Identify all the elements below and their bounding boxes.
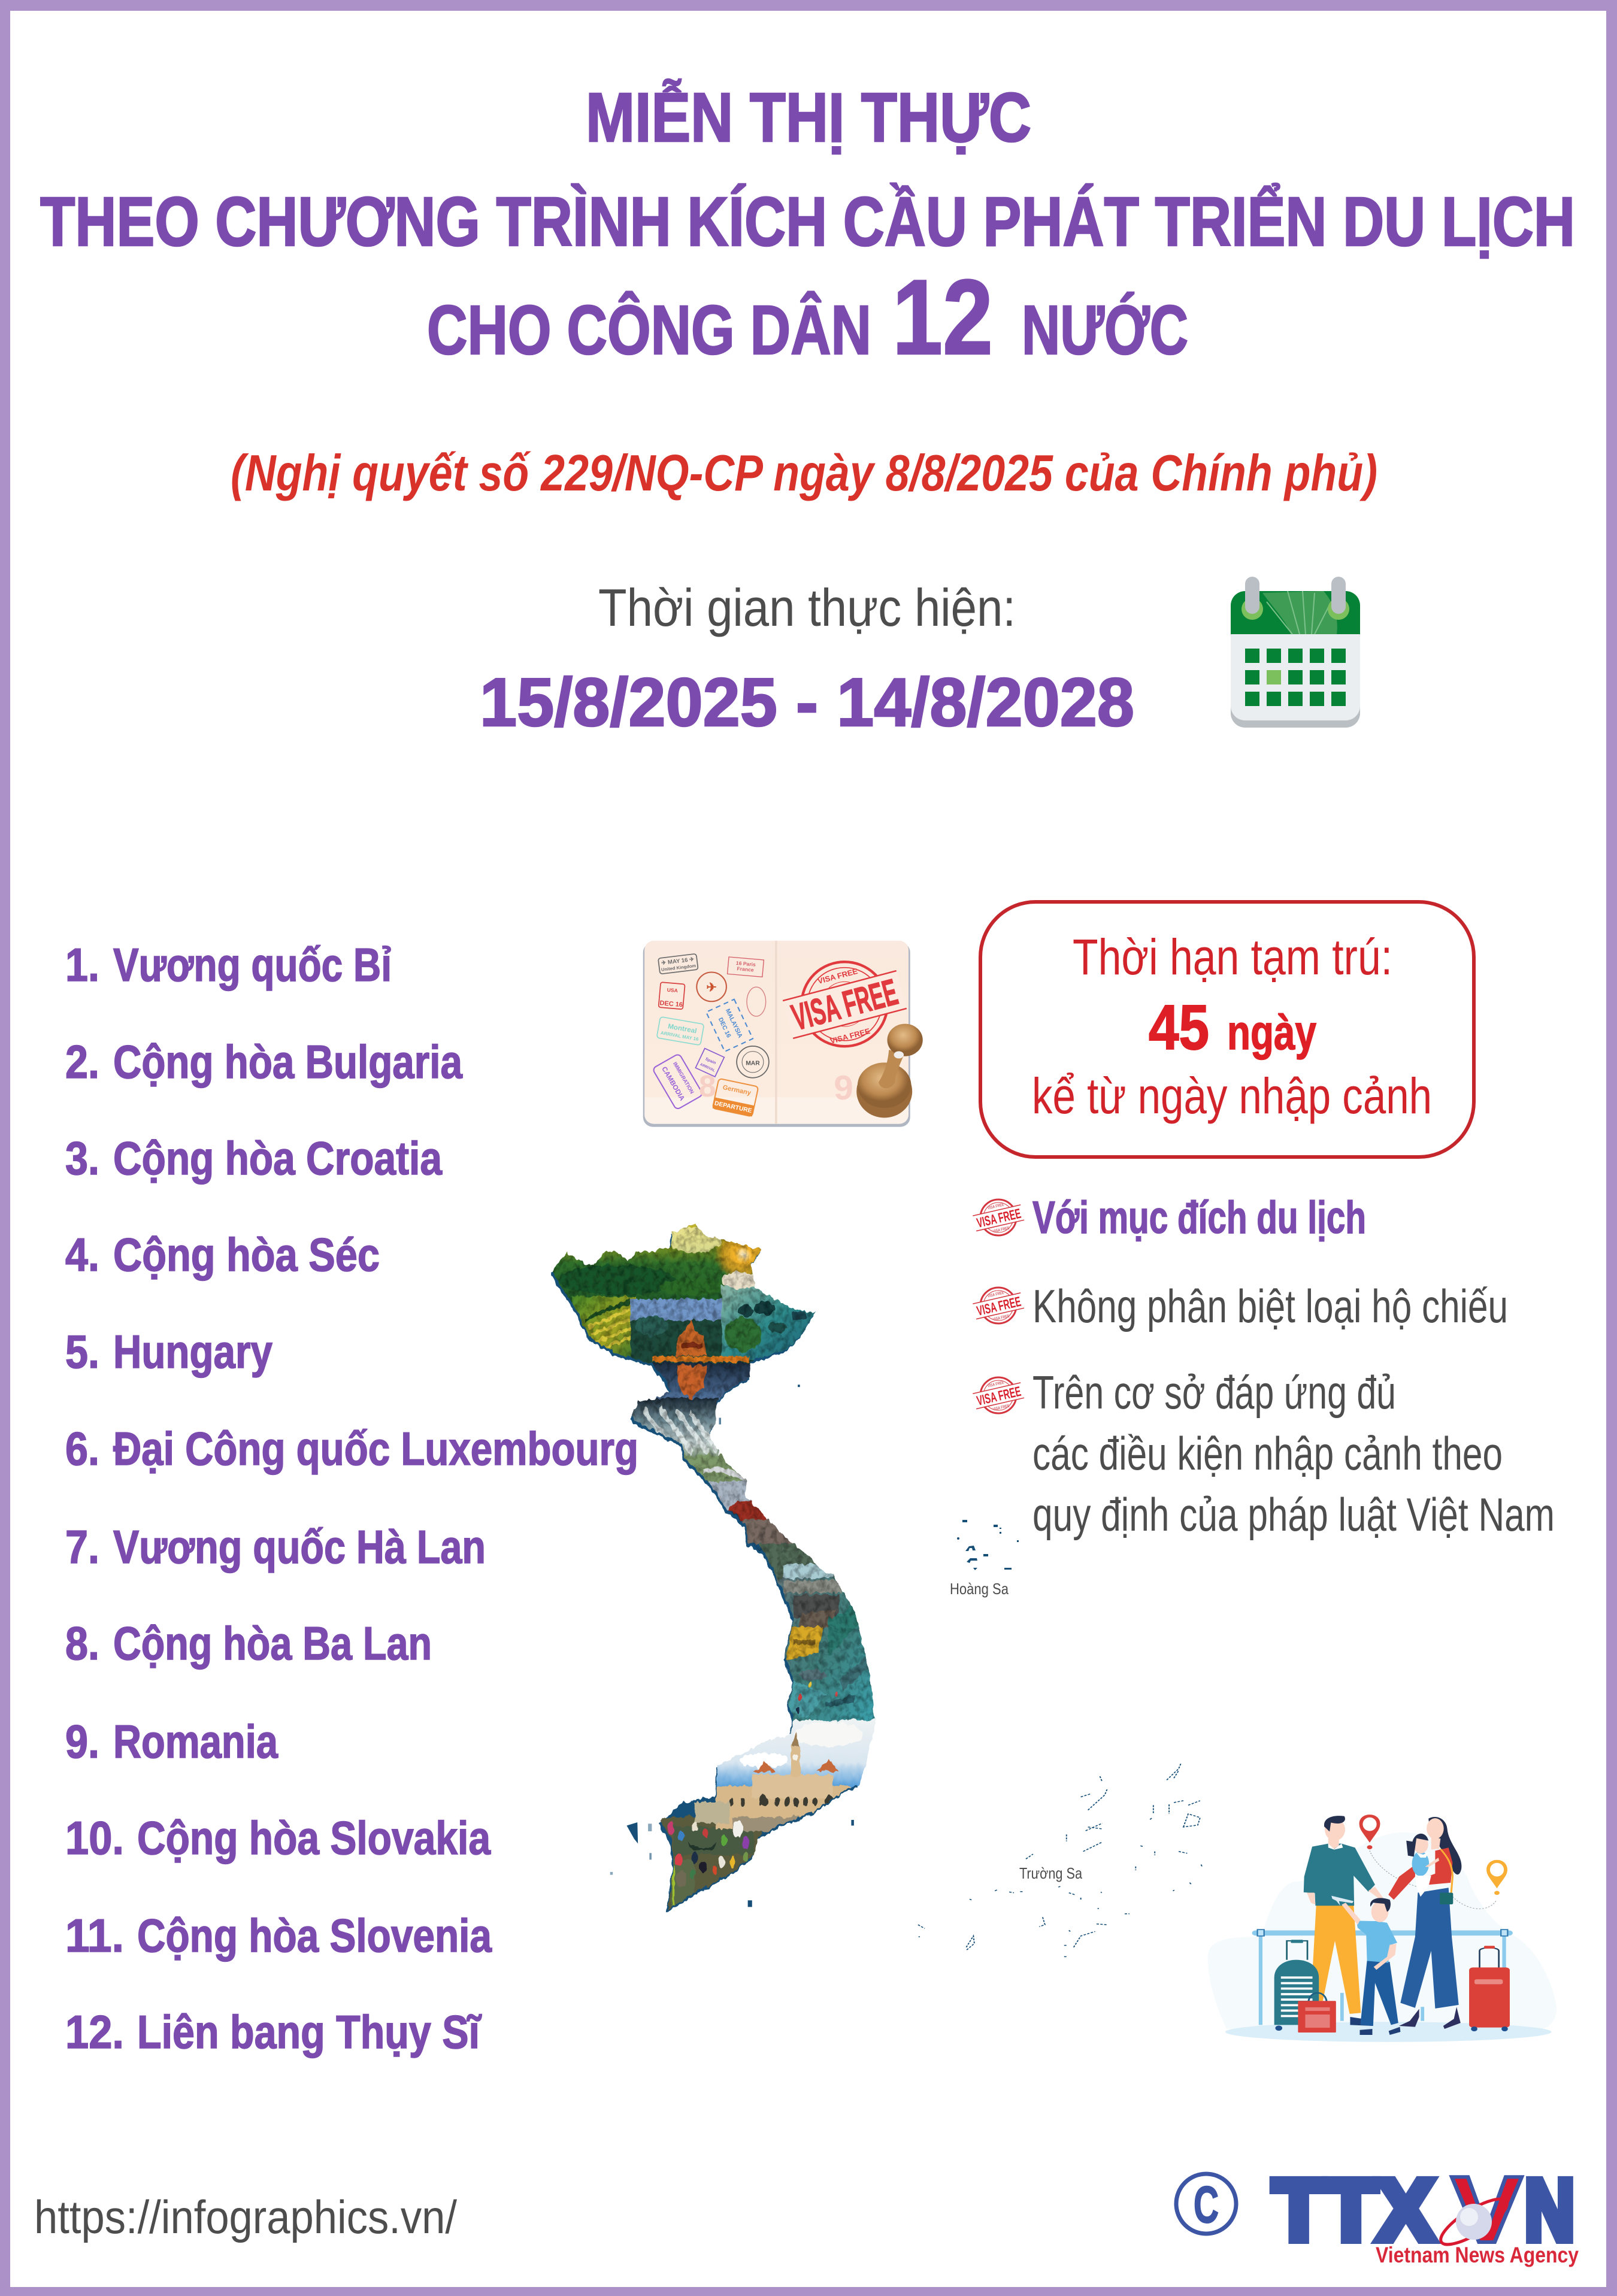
passport page stamps: MAR [746,1060,760,1067]
Hoàng Sa islands [957,1520,1019,1570]
list item 9 [65,1715,278,1768]
passport page stamps: DEPARTURE [714,1100,753,1114]
passport page stamps: CAMBODIA [660,1065,686,1102]
Hoàng Sa label: Hoàng Sa [950,1580,1009,1598]
red bag [1298,1993,1336,2033]
passport page stamps: 16 Paris [736,960,756,968]
list item 9: Romania [113,1715,278,1768]
passport page stamps: IMMIGRATION [672,1061,695,1095]
icon: visa free seal: VISA FREE [992,1314,1010,1322]
icon: visa free seal [971,1287,1026,1326]
callout: length of stay [980,902,1474,1157]
list item 8: 8. [65,1617,99,1670]
icon: copyright: C [1194,2176,1219,2234]
passport page stamps: 8 [699,1069,716,1103]
bullet text: Với mục đích du lịch [1032,1192,1366,1243]
passport page stamps: France [737,965,754,973]
visa free stamp: VISA FREE [788,971,902,1038]
title line 3 [427,258,1188,377]
passport page stamps: DEC 16 [717,1017,732,1039]
passport page stamps: ARRIVAL MAY 16 [660,1030,700,1042]
list item 5: Hungary [113,1325,272,1378]
passport page stamps: 9 [834,1068,853,1107]
list item 7: 7. [65,1520,99,1573]
callout number [1149,992,1316,1063]
list item 5 [65,1325,272,1378]
illustration: traveling family [1207,1815,1557,2042]
passport page stamps: Montreal [667,1022,697,1035]
bullet 2 [971,1280,1508,1332]
map photo collage [510,1216,885,1916]
logo globe [1435,2191,1513,2252]
father [1304,1816,1383,2026]
callout number: 45 [1149,992,1209,1063]
map of Vietnam [551,1223,876,1913]
list item 2: 2. [65,1035,99,1088]
icon: visa free seal: VISA FREE [975,1205,1022,1231]
Trường Sa archipelago [918,1763,1202,1956]
period label: Thời gian thực hiện: [598,578,1016,637]
icon: visa free seal: VISA FREE [975,1294,1022,1319]
railing [1252,1930,1513,2025]
list item 10: Cộng hòa Slovakia [137,1812,491,1864]
logo letters: TTX [1273,2162,1434,2258]
list item 6: Đại Công quốc Luxembourg [113,1422,638,1475]
list item 2: Cộng hòa Bulgaria [113,1035,463,1088]
title line 3: 12 [892,258,993,377]
passport page stamps: United Kingdom [661,963,697,973]
visa free stamp: VISA FREE [817,967,859,986]
red suitcase [1469,1946,1510,2031]
list item 10: 10. [65,1812,124,1864]
icon: visa free seal: VISA FREE [992,1404,1010,1412]
icon: yellow location pin [1486,1860,1507,1895]
period dates: 15/8/2025 - 14/8/2028 [480,665,1134,741]
Hoàng Sa archipelago [950,1520,1019,1598]
icon: visa free seal: VISA FREE [987,1291,1005,1299]
subtitle: resolution: (Nghị quyết số 229/NQ-CP ngày 8/8/2025 của Chính phủ) [231,445,1377,502]
logo letters: V [1451,2157,1522,2262]
title [40,78,1575,377]
passport with visa free stamp [643,941,923,1127]
icon: visa free seal: VISA FREE [987,1202,1005,1211]
bullet text [1032,1366,1555,1541]
website url: https://infographics.vn/ [34,2191,457,2243]
list item 5: 5. [65,1325,99,1378]
icon: calendar [1231,577,1360,728]
list item 11: Cộng hòa Slovenia [137,1909,492,1962]
background blob [1207,1832,1557,2029]
icon: visa free seal: VISA FREE [975,1383,1022,1409]
dotted routes [1370,1850,1496,1909]
wooden stamper [856,1024,923,1118]
title line 3: CHO CÔNG DÂN [427,290,871,369]
passport page stamps [652,954,853,1116]
Trường Sa islands [918,1763,1202,1956]
Trường Sa label: Trường Sa [1019,1864,1082,1882]
list item 6: 6. [65,1422,99,1475]
callout box [980,902,1474,1157]
passport page stamps: ✈ [706,980,717,994]
passport page stamps: USA [667,987,678,993]
country list [65,938,638,2058]
callout number: ngày [1227,1005,1316,1060]
mother and daughter [1388,1817,1461,2029]
list item 12: Liên bang Thụy Sĩ [137,2006,482,2058]
title line 1: MIỄN THỊ THỰC [586,78,1031,156]
icon: visa free seal: VISA FREE [987,1380,1005,1389]
list item 12: 12. [65,2006,124,2058]
list item 4: 4. [65,1228,99,1281]
icon: copyright [1176,2174,1236,2234]
icon: visa free seal: VISA FREE [992,1226,1010,1234]
logo tagline: Vietnam News Agency [1376,2243,1579,2267]
passport page stamps: MALAYSIA [724,1008,743,1040]
bullet text: Trên cơ sở đáp ứng đủ [1032,1366,1396,1419]
callout line 1: Thời hạn tạm trú: [1073,929,1392,985]
passport page stamps: DEC 16 [659,999,683,1008]
passport page stamps: ✈ MAY 16 ✈ [661,956,695,967]
logo letters [1273,2157,1574,2262]
bullet 1 [971,1192,1366,1243]
list item 3: Cộng hòa Croatia [113,1132,443,1185]
son [1342,1898,1400,2035]
passport page stamps: Germany [722,1084,752,1097]
visa free stamp: VISA FREE [829,1026,871,1046]
passport page stamps: ARRIVAL [700,1062,716,1073]
visa free stamp [783,962,907,1046]
list item 1: Vương quốc Bỉ [113,938,392,991]
bullet 3 [971,1366,1555,1541]
teal suitcase [1274,1940,1319,2031]
passport page stamps: Spain [704,1057,716,1065]
list item 8: Cộng hòa Ba Lan [113,1617,432,1670]
toy plane [1331,1896,1353,1906]
map small islands [610,1385,854,1907]
icon: visa free seal [971,1199,1026,1238]
logo letters: N [1525,2162,1574,2258]
icon: red location pin [1359,1815,1380,1849]
implementation period [480,578,1134,741]
title line 3: NƯỚC [1022,291,1188,369]
list item 9: 9. [65,1715,99,1768]
list item 1: 1. [65,938,99,991]
icon: visa free seal [971,1377,1026,1416]
map coastline shadow [552,1226,874,1912]
ground [1225,2022,1552,2042]
list item 3: 3. [65,1132,99,1185]
list item 4: Cộng hòa Séc [113,1228,380,1281]
list item 7: Vương quốc Hà Lan [113,1520,486,1573]
list item 11: 11. [65,1909,124,1962]
logo: TTXVN [1273,2157,1579,2267]
callout line 3: kể từ ngày nhập cảnh [1032,1068,1432,1124]
